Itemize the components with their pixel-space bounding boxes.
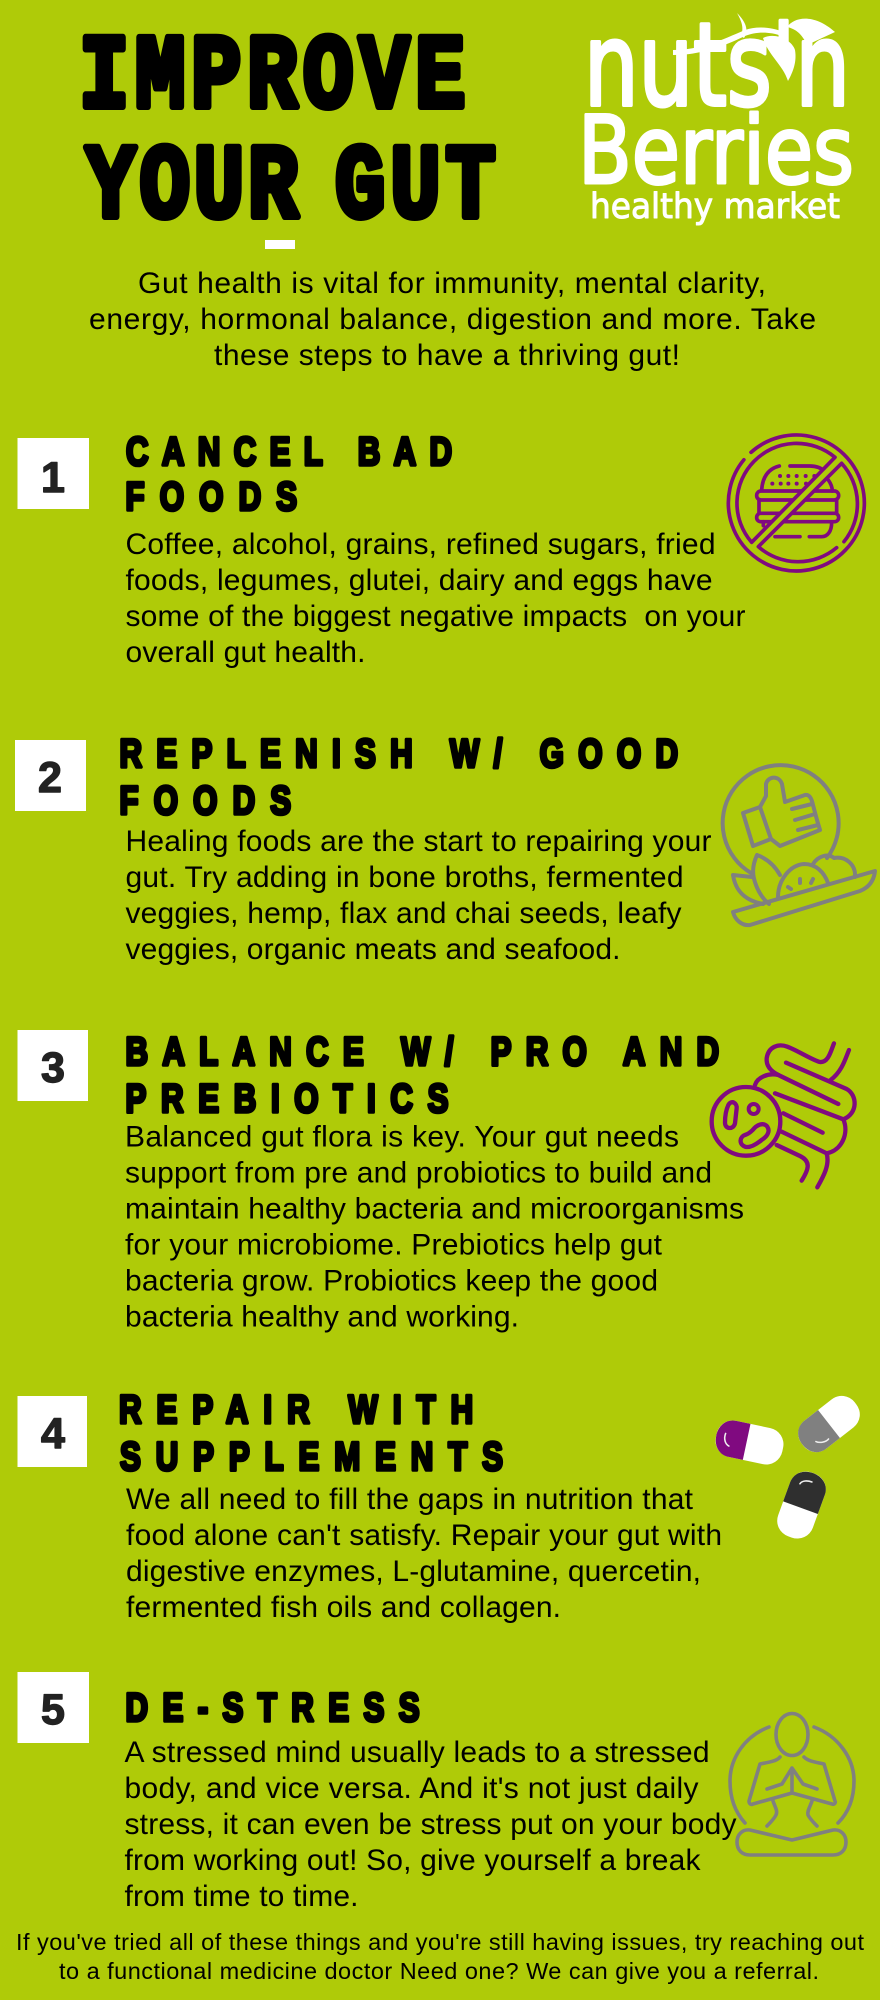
panel: step 4 repair	[18, 1387, 866, 1624]
body text 2: gut. Try adding in bone broths, fermented	[126, 861, 684, 894]
body text 1: overall gut health.	[126, 636, 366, 669]
dark capsule	[773, 1467, 830, 1543]
body text 2	[126, 825, 712, 966]
heading 4: SUPPLEMENTS	[120, 1434, 503, 1479]
body text 4: digestive enzymes, L-glutamine, quercetin,	[126, 1555, 701, 1588]
panel: step 5 de-stress	[18, 1672, 854, 1913]
icon: no burger	[728, 435, 864, 571]
body text 1	[126, 528, 746, 669]
body text 4: fermented fish oils and collagen.	[126, 1591, 561, 1624]
heading 3: PREBIOTICS	[126, 1076, 448, 1121]
heading 1: CANCEL BAD	[126, 429, 452, 474]
number box 1	[18, 438, 89, 509]
heading 1: FOODS	[126, 474, 297, 519]
heading 3	[126, 1029, 719, 1121]
title: GUT	[335, 129, 496, 249]
body text 4: food alone can't satisfy. Repair your gut with	[126, 1519, 722, 1552]
body text 5	[124, 1736, 736, 1913]
heading 2: FOODS	[120, 778, 291, 823]
number box 2	[15, 740, 86, 811]
body text 1: some of the biggest negative impacts on your	[126, 600, 746, 633]
footer note: If you've tried all of these things and you're still having issues, try reaching out	[16, 1929, 864, 1955]
number box 3: 3	[41, 1044, 65, 1092]
heading 3: BALANCE W/ PRO AND	[126, 1029, 719, 1074]
title: IMPROVE	[79, 19, 465, 139]
body text 4: We all need to fill the gaps in nutrition that	[126, 1483, 694, 1516]
heading 4: REPAIR WITH	[119, 1387, 473, 1432]
body text 4	[126, 1483, 722, 1624]
body text 1: Coffee, alcohol, grains, refined sugars, fried	[126, 528, 716, 561]
intro text	[89, 267, 816, 372]
panel: step 2 replenish	[15, 731, 875, 966]
body text 3: bacteria healthy and working.	[125, 1300, 519, 1334]
body text 5: body, and vice versa. And it's not just daily	[124, 1772, 698, 1805]
grey capsule	[792, 1389, 866, 1459]
body text 2: veggies, organic meats and seafood.	[126, 933, 620, 966]
number box 4	[18, 1396, 87, 1467]
title: YOUR	[86, 129, 298, 249]
number box 3	[18, 1030, 88, 1101]
intro text: these steps to have a thriving gut!	[214, 339, 680, 372]
intro text: energy, hormonal balance, digestion and more. Take	[89, 303, 816, 336]
number box 5	[18, 1672, 89, 1743]
heading 4	[119, 1387, 503, 1479]
body text 5: from time to time.	[124, 1880, 358, 1913]
icon: capsules	[712, 1389, 866, 1543]
body text 2: veggies, hemp, flax and chai seeds, leafy	[126, 897, 682, 930]
heading 1	[126, 429, 452, 519]
footer note	[16, 1929, 864, 1984]
body text 5: A stressed mind usually leads to a stressed	[124, 1736, 710, 1769]
number box 4: 4	[41, 1410, 65, 1458]
body text 3: maintain healthy bacteria and microorganisms	[125, 1192, 744, 1226]
body text 3	[125, 1120, 744, 1334]
number box 5: 5	[41, 1686, 65, 1734]
body text 3: Balanced gut flora is key. Your gut needs	[125, 1120, 679, 1154]
footer note: to a functional medicine doctor Need one? We can give you a referral.	[59, 1958, 819, 1984]
logo: Nuts'n Berries healthy market	[578, 0, 854, 227]
heading 5: DE-STRESS	[126, 1685, 420, 1730]
white dash	[265, 240, 295, 249]
body text 3: bacteria grow. Probiotics keep the good	[125, 1264, 658, 1298]
body text 5: stress, it can even be stress put on your body	[124, 1808, 736, 1841]
title	[79, 19, 496, 249]
logo: Nuts'n Berries healthy market: healthy market	[590, 187, 840, 227]
icon: thumbs up plate	[723, 765, 875, 925]
purple capsule	[712, 1417, 787, 1468]
panel: step 3 balance	[18, 1029, 855, 1334]
body text 5: from working out! So, give yourself a break	[124, 1844, 702, 1877]
intro text: Gut health is vital for immunity, mental clarity,	[138, 267, 766, 300]
body text 1: foods, legumes, glutei, dairy and eggs have	[126, 564, 712, 597]
panel: step 1 cancel bad foods	[18, 429, 864, 669]
icon: meditation	[730, 1714, 854, 1855]
icon: gut with bacteria	[712, 1043, 855, 1187]
number box 2: 2	[38, 754, 62, 802]
body text 3: support from pre and probiotics to build and	[125, 1156, 712, 1190]
body text 2: Healing foods are the start to repairing your	[126, 825, 712, 858]
body text 3: for your microbiome. Prebiotics help gut	[125, 1228, 663, 1262]
number box 1: 1	[41, 454, 65, 502]
heading 2: REPLENISH W/ GOOD	[120, 731, 678, 776]
heading 2	[120, 731, 678, 823]
